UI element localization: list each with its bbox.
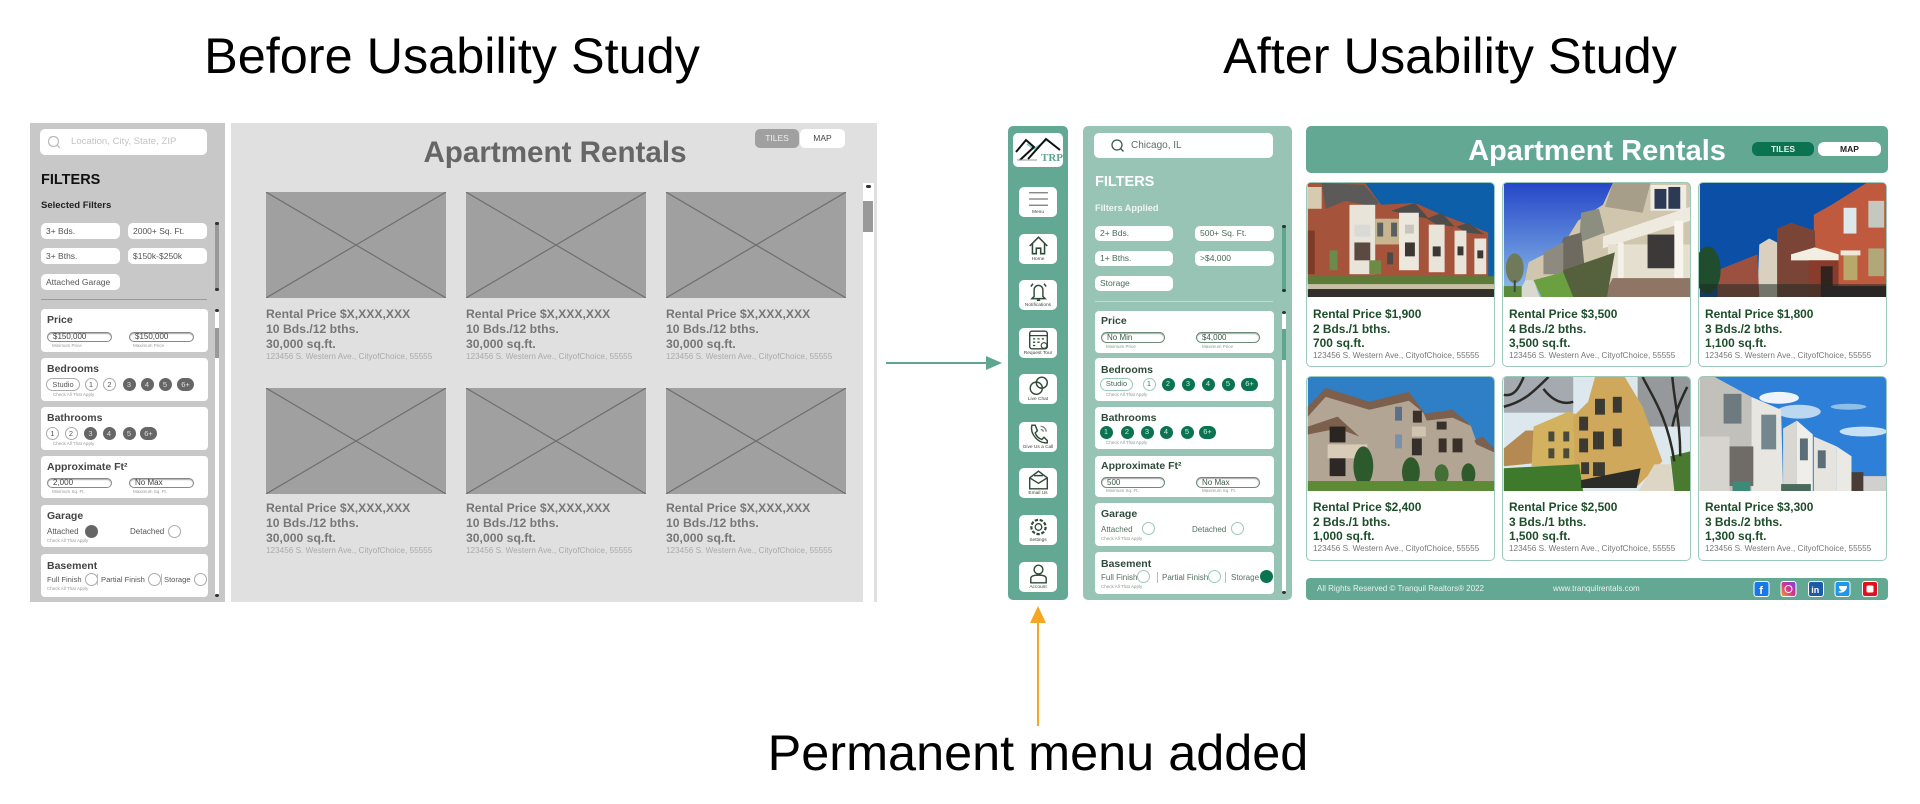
listing details: 30,000 sq.ft. <box>666 531 736 545</box>
image placeholder <box>466 192 646 298</box>
listing details: 123456 S. Western Ave., CityofChoice, 55555 <box>1705 544 1871 552</box>
listing details: 30,000 sq.ft. <box>266 337 336 351</box>
filter card: bathrooms <box>41 407 208 450</box>
listing details: 3,500 sq.ft. <box>1509 336 1570 350</box>
listing details: 3 Bds./2 bths. <box>1705 322 1782 336</box>
listing details <box>1313 500 1495 554</box>
menu button: request tour: Request Tour <box>1024 351 1052 356</box>
bathroom options: 1 <box>50 429 55 438</box>
bedroom options: 5 <box>1226 379 1230 388</box>
bathroom options: 6+ <box>144 429 153 438</box>
bathroom options: 2 <box>1125 427 1129 436</box>
toggle: tiles: TILES <box>1771 144 1795 154</box>
scrollbar: selected filters <box>215 223 219 290</box>
bedroom options: Check All That Apply <box>53 392 94 397</box>
listing details: Rental Price $X,XXX,XXX <box>666 501 810 515</box>
selected filter chips: 3+ Bths. <box>46 251 77 261</box>
label: selected filters: Selected Filters <box>41 200 111 211</box>
photo: townhouses with porches <box>1504 183 1690 297</box>
website url: www.tranquilrentals.com <box>1553 584 1640 593</box>
bathroom options: 2 <box>69 429 73 438</box>
bathroom options: 5 <box>1185 427 1189 436</box>
menu button: notifications <box>1019 280 1057 310</box>
basement options: Check All That Apply <box>47 586 88 591</box>
listing details: 123456 S. Western Ave., CityofChoice, 55555 <box>1509 350 1675 360</box>
filter card: bedrooms <box>41 358 208 401</box>
listing details: 123456 S. Western Ave., CityofChoice, 55555 <box>1705 350 1871 360</box>
price fields: Maximum Price <box>1202 344 1233 349</box>
menu button: email us <box>1019 468 1057 498</box>
listing details <box>466 307 632 361</box>
bedroom options: 2 <box>1166 379 1170 388</box>
listing card: $2,400 <box>1306 376 1495 561</box>
price fields: $4,000 <box>1202 333 1226 342</box>
basement options: Partial Finish <box>101 575 145 584</box>
listing details: 10 Bds./12 bths. <box>666 322 759 336</box>
listing details: 10 Bds./12 bths. <box>266 516 359 530</box>
listing tile 3 <box>666 192 846 361</box>
arrow: before to after <box>886 356 1002 370</box>
garage options <box>1101 522 1244 541</box>
selected filter chips <box>41 223 207 290</box>
bedroom options <box>1100 378 1258 397</box>
bedroom options: 1 <box>1147 379 1151 388</box>
basement options: Full Finish <box>1101 573 1137 582</box>
listing tile 1 <box>266 192 446 361</box>
listing details <box>266 307 432 361</box>
bedroom options <box>46 378 194 397</box>
filter card: garage <box>41 505 208 547</box>
listing details: 123456 S. Western Ave., CityofChoice, 55555 <box>1313 350 1479 360</box>
image placeholder <box>266 192 446 298</box>
listing details: Rental Price $1,900 <box>1313 307 1421 321</box>
basement options: Storage <box>1231 573 1259 582</box>
listing card: $3,500 <box>1502 182 1691 367</box>
square feet fields: 2,000 <box>53 478 73 487</box>
panel: wireframe filters <box>30 123 225 602</box>
listing card: $2,500 <box>1502 376 1691 561</box>
listing details: 1,100 sq.ft. <box>1705 336 1766 350</box>
listing details <box>666 307 832 361</box>
bathroom options <box>1100 426 1216 445</box>
listing details <box>266 501 432 555</box>
listing tile 2 <box>466 192 646 361</box>
title: Garage <box>47 510 83 522</box>
menu button: email us: Email Us <box>1028 491 1048 496</box>
listing details: 123456 S. Western Ave., CityofChoice, 55555 <box>466 546 632 555</box>
applied filter chips: 500+ Sq. Ft. <box>1200 228 1247 238</box>
panel: redesigned filters <box>1083 126 1292 600</box>
garage options: Attached <box>1101 525 1133 534</box>
listing details <box>1705 307 1871 360</box>
listing details: 30,000 sq.ft. <box>466 531 536 545</box>
copyright text: All Rights Reserved © Tranquil Realtors® 2022 <box>1317 584 1484 593</box>
listing details: Rental Price $X,XXX,XXX <box>666 307 810 321</box>
basement options: Check All That Apply <box>1101 584 1142 589</box>
menu button: settings <box>1019 515 1057 545</box>
basement options: Full Finish <box>47 575 82 584</box>
listing details <box>1313 307 1479 360</box>
listing details: 30,000 sq.ft. <box>266 531 336 545</box>
listing details: Rental Price $3,300 <box>1705 500 1813 514</box>
selected filter chips: 2000+ Sq. Ft. <box>133 226 184 236</box>
listing details: 123456 S. Western Ave., CityofChoice, 55555 <box>666 352 832 361</box>
garage options: Check All That Apply <box>1101 536 1142 541</box>
photo: stucco apartments <box>1307 377 1495 491</box>
bathroom options: 5 <box>127 429 131 438</box>
scrollbar: filter list <box>1282 311 1286 594</box>
listing details: 2 Bds./1 bths. <box>1313 322 1390 336</box>
square feet fields: 500 <box>1107 478 1120 487</box>
price fields <box>47 332 194 348</box>
title: apartment rentals: Apartment Rentals <box>423 136 687 169</box>
listing details <box>466 501 632 555</box>
bedroom options: 6+ <box>181 380 190 389</box>
selected filter chips: Attached Garage <box>46 277 110 287</box>
menu button: give us a call <box>1019 422 1057 452</box>
image placeholder <box>666 388 846 494</box>
title: Approximate Ft² <box>47 461 128 473</box>
listing details: 10 Bds./12 bths. <box>466 516 559 530</box>
listing details: 1,000 sq.ft. <box>1313 529 1374 543</box>
filter card: basement <box>41 554 208 597</box>
filter card: bedrooms <box>1095 358 1274 401</box>
title: Bedrooms <box>47 363 99 375</box>
title: Price <box>47 314 73 326</box>
listing details: 1,300 sq.ft. <box>1705 529 1766 543</box>
bathroom options <box>46 427 157 446</box>
bathroom options: 3 <box>1145 427 1149 436</box>
listing details: 10 Bds./12 bths. <box>666 516 759 530</box>
social icons: in <box>1811 585 1819 595</box>
title: Approximate Ft² <box>1101 460 1182 472</box>
price fields: Maximum Price <box>133 343 164 348</box>
menu button: notifications: Notifications <box>1025 303 1051 308</box>
filter card: approximate square feet <box>41 456 208 498</box>
toggle: map: MAP <box>1840 144 1859 154</box>
bathroom options: 6+ <box>1203 427 1212 436</box>
menu button: request tour <box>1019 328 1057 358</box>
menu button: live chat: Live Chat <box>1028 397 1048 402</box>
logo: TRP: TRP <box>1041 152 1063 164</box>
photo: brick walk-up row <box>1699 183 1886 297</box>
listing details: 10 Bds./12 bths. <box>466 322 559 336</box>
garage options: Detached <box>1192 525 1226 534</box>
price fields: $150,000 <box>53 332 86 341</box>
listing card: $1,800 <box>1698 182 1887 367</box>
toggle: tiles <box>755 129 799 148</box>
square feet fields: Maximum Sq. Ft. <box>133 489 167 494</box>
arrow: points to permanent menu <box>1030 606 1046 726</box>
bedroom options: 3 <box>1186 379 1190 388</box>
listing details: 4 Bds./2 bths. <box>1509 322 1586 336</box>
filter card: price <box>1095 311 1274 353</box>
listing details: 30,000 sq.ft. <box>466 337 536 351</box>
toggle: map <box>800 129 845 148</box>
bedroom options: 3 <box>127 380 131 389</box>
square feet fields: No Max <box>1202 478 1230 487</box>
bedroom options: 5 <box>163 380 167 389</box>
listing details: Rental Price $1,800 <box>1705 307 1813 321</box>
panel: permanent menu sidebar <box>1008 126 1068 600</box>
garage options <box>47 525 181 543</box>
square feet fields <box>47 478 194 494</box>
heading: permanent menu added: Permanent menu added <box>768 724 1308 781</box>
heading: filters: FILTERS <box>1095 174 1154 190</box>
title: Bathrooms <box>47 412 102 424</box>
menu button: account <box>1019 562 1057 592</box>
price fields: Minimum Price <box>1106 344 1136 349</box>
bathroom options: 4 <box>107 429 111 438</box>
photo: brick apartment complex <box>1308 183 1494 297</box>
bedroom options: 2 <box>107 380 112 389</box>
listing details <box>1705 500 1887 554</box>
listing details: Rental Price $X,XXX,XXX <box>266 501 410 515</box>
price fields: No Min <box>1107 333 1132 342</box>
label: filters applied: Filters Applied <box>1095 203 1158 213</box>
listing tile 5 <box>466 388 646 555</box>
search box <box>40 129 207 155</box>
scrollbar: applied filters <box>1282 226 1286 291</box>
bedroom options: 6+ <box>1245 379 1254 388</box>
photo: yellow brick corner building <box>1503 377 1691 491</box>
photo: modern white townhomes <box>1699 377 1887 491</box>
listing details: Rental Price $2,400 <box>1313 500 1421 514</box>
menu button: give us a call: Give Us a Call <box>1023 445 1053 450</box>
listing details: 123456 S. Western Ave., CityofChoice, 55555 <box>266 546 432 555</box>
applied filter chips: >$4,000 <box>1200 253 1231 263</box>
garage options: Attached <box>47 527 79 536</box>
search box: Location, City, State, ZIP <box>71 136 176 147</box>
applied filter chips: 1+ Bths. <box>1100 253 1131 263</box>
listing details: Rental Price $2,500 <box>1509 500 1617 514</box>
filter card: basement <box>1095 552 1274 594</box>
listing details: 700 sq.ft. <box>1313 336 1365 350</box>
listing details: Rental Price $X,XXX,XXX <box>466 307 610 321</box>
listing tile 6 <box>666 388 846 555</box>
heading: after usability study: After Usability Study <box>1223 27 1677 84</box>
menu button: home <box>1019 234 1057 264</box>
scrollbar: filter list <box>215 309 219 597</box>
listing tile 4 <box>266 388 446 555</box>
price fields <box>1101 332 1260 349</box>
listing details: 123456 S. Western Ave., CityofChoice, 55555 <box>1509 544 1675 552</box>
bathroom options: 4 <box>1164 427 1168 436</box>
listing details: 123456 S. Western Ave., CityofChoice, 55555 <box>666 546 832 555</box>
listing details <box>1509 500 1691 554</box>
applied filter chips: Storage <box>1100 278 1130 288</box>
search box: Chicago, IL <box>1131 140 1182 151</box>
bedroom options: 4 <box>145 380 149 389</box>
selected filter chips: $150k-$250k <box>133 251 182 261</box>
square feet fields: Minimum Sq. Ft. <box>1106 488 1139 493</box>
price fields: Minimum Price <box>52 343 82 348</box>
listing details: Rental Price $X,XXX,XXX <box>466 501 610 515</box>
bathroom options: 1 <box>1104 427 1108 436</box>
social icons <box>1752 580 1882 598</box>
basement options: Partial Finish <box>1162 573 1208 582</box>
listing details <box>666 501 832 555</box>
listing details: 123456 S. Western Ave., CityofChoice, 55555 <box>466 352 632 361</box>
listing details: 123456 S. Western Ave., CityofChoice, 55555 <box>266 352 432 361</box>
heading: filters: FILTERS <box>41 172 100 188</box>
basement options: Storage <box>164 575 191 584</box>
listing details: 10 Bds./12 bths. <box>266 322 359 336</box>
scrollbar: listings <box>863 183 874 602</box>
title: Apartment Rentals <box>1468 134 1726 166</box>
menu button: live chat <box>1019 374 1057 404</box>
listing details: 3 Bds./1 bths. <box>1509 514 1586 528</box>
square feet fields <box>1101 477 1260 493</box>
basement options <box>1101 570 1273 589</box>
menu button: settings: Settings <box>1029 538 1047 543</box>
listing details: 30,000 sq.ft. <box>666 337 736 351</box>
garage options: Check All That Apply <box>47 538 88 543</box>
bedroom options: Studio <box>52 380 74 389</box>
logo: TRP <box>1013 133 1063 167</box>
listing details: 1,500 sq.ft. <box>1509 529 1570 543</box>
title: Price <box>1101 315 1127 327</box>
applied filter chips: 2+ Bds. <box>1100 228 1129 238</box>
square feet fields: No Max <box>135 478 163 487</box>
panel: wireframe listings <box>231 123 877 602</box>
toggle: tiles: TILES <box>765 133 789 143</box>
image placeholder <box>466 388 646 494</box>
listing card: $1,900 <box>1306 182 1495 367</box>
listing details: 123456 S. Western Ave., CityofChoice, 55555 <box>1313 544 1479 552</box>
selected filter chips: 3+ Bds. <box>46 226 75 236</box>
header bar: apartment rentals <box>1306 126 1888 173</box>
garage options: Detached <box>130 527 164 536</box>
bedroom options: Check All That Apply <box>1106 392 1147 397</box>
menu button: home: Home <box>1032 257 1044 262</box>
image placeholder <box>666 192 846 298</box>
listing details: Rental Price $X,XXX,XXX <box>266 307 410 321</box>
filter card: garage <box>1095 503 1274 546</box>
title: Bathrooms <box>1101 412 1156 424</box>
filter card: approximate square feet <box>1095 456 1274 497</box>
title: Basement <box>47 560 97 572</box>
square feet fields: Minimum Sq. Ft. <box>52 489 85 494</box>
listing details: 2 Bds./1 bths. <box>1313 514 1390 528</box>
menu button: account: Account <box>1029 585 1047 590</box>
title: Garage <box>1101 508 1137 520</box>
filter card: bathrooms <box>1095 407 1274 449</box>
bedroom options: 4 <box>1206 379 1210 388</box>
applied filter chips <box>1095 226 1274 291</box>
title: Basement <box>1101 558 1151 570</box>
price fields: $150,000 <box>135 332 168 341</box>
filter card: price <box>41 309 208 352</box>
bathroom options: Check All That Apply <box>1106 440 1147 445</box>
footer bar <box>1306 578 1888 600</box>
social icons: f <box>1759 585 1763 597</box>
toggle: tiles <box>1752 142 1814 156</box>
toggle: map <box>1818 142 1881 156</box>
basement options <box>47 573 207 591</box>
menu button: menu: Menu <box>1032 210 1044 215</box>
bathroom options: 3 <box>88 429 93 438</box>
bathroom options: Check All That Apply <box>53 441 94 446</box>
bedroom options: Studio <box>1106 379 1127 388</box>
listing details: 3 Bds./2 bths. <box>1705 514 1782 528</box>
toggle: map: MAP <box>813 133 832 143</box>
bedroom options: 1 <box>89 380 93 389</box>
square feet fields: Maximum Sq. Ft. <box>1202 488 1236 493</box>
image placeholder <box>266 388 446 494</box>
listing details: Rental Price $3,500 <box>1509 307 1617 321</box>
search box <box>1094 133 1273 158</box>
heading: before usability study: Before Usability Study <box>204 27 700 84</box>
listing details <box>1509 307 1675 360</box>
listing card: $3,300 <box>1698 376 1887 561</box>
menu button: menu <box>1019 187 1057 217</box>
title: Bedrooms <box>1101 364 1153 376</box>
